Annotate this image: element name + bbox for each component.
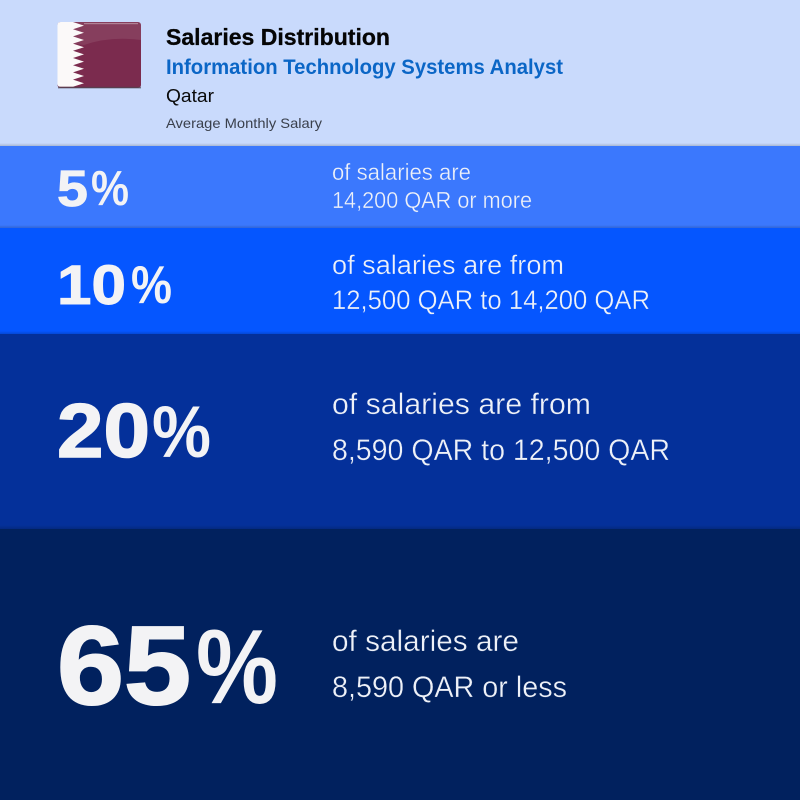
text: 65% description (332, 625, 567, 704)
stat: 20%: 20 (57, 389, 150, 474)
panel: 65% band (0, 529, 800, 800)
text: 5% description: 14,200 QAR or more (332, 187, 532, 213)
stat: 5%: 5 (57, 160, 88, 217)
stat: 10%: % (131, 256, 172, 315)
panel: 5% band (0, 146, 800, 228)
text: 65% description: 8,590 QAR or less (332, 671, 567, 704)
stat: 20%: % (152, 392, 211, 473)
text: 65% description: of salaries are (332, 625, 519, 658)
stat: 20% (57, 389, 211, 474)
heading: Salaries Distribution: Salaries Distribution (166, 24, 390, 50)
panel: 10% band (0, 228, 800, 334)
stat: 10% (57, 253, 172, 316)
text: 10% description: of salaries are from (332, 250, 564, 280)
stat: 5%: % (91, 162, 129, 216)
text: salary type: Average Monthly Salary (166, 115, 322, 131)
text: 5% description (332, 159, 532, 213)
icon: Qatar flag (58, 22, 141, 88)
subheading: job title: Information Technology Systems Analyst (166, 56, 563, 79)
text: 5% description: of salaries are (332, 159, 471, 185)
text: 10% description: 12,500 QAR to 14,200 QAR (332, 285, 650, 315)
stat: 65%: 65 (57, 604, 191, 728)
stat: 5% (57, 160, 129, 217)
panel: 20% band (0, 334, 800, 529)
stat: 65%: % (196, 608, 278, 726)
text: 20% description: 8,590 QAR to 12,500 QAR (332, 434, 670, 467)
panel: header (0, 0, 800, 146)
text: 20% description (332, 388, 670, 467)
text: country: Qatar (166, 86, 214, 106)
stat: 10%: 10 (57, 253, 126, 316)
text: 20% description: of salaries are from (332, 388, 591, 421)
stat: 65% (57, 604, 278, 728)
text: 10% description (332, 250, 650, 315)
